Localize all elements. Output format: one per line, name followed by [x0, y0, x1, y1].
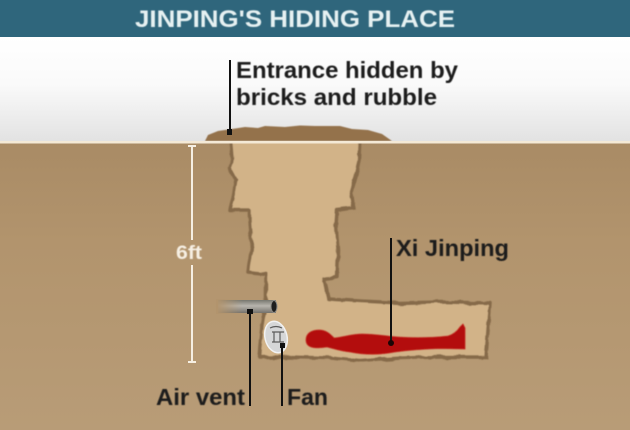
fan label: Fan — [287, 384, 328, 410]
mound of bricks and rubble — [205, 126, 392, 141]
sky background — [0, 37, 630, 142]
6ft label: 6ft — [176, 243, 203, 264]
callout: Xi Jinping — [388, 235, 509, 346]
underground hiding tunnel — [229, 134, 490, 361]
entrance label: bricks and rubble — [236, 84, 437, 110]
Xi Jinping label: Xi Jinping — [396, 235, 509, 261]
callout: entrance — [227, 57, 458, 135]
callout: fan — [280, 343, 328, 410]
fan — [261, 319, 291, 355]
title: JINPING'S HIDING PLACE — [135, 6, 455, 33]
header bar — [0, 0, 630, 37]
soil background — [0, 142, 630, 430]
callout: air vent — [156, 309, 253, 410]
ground line — [0, 141, 630, 144]
Xi Jinping body silhouette — [306, 324, 465, 354]
air vent pipe — [216, 299, 277, 314]
air vent label: Air vent — [156, 384, 245, 410]
entrance label: Entrance hidden by — [236, 57, 458, 83]
6ft depth marker — [176, 146, 203, 362]
